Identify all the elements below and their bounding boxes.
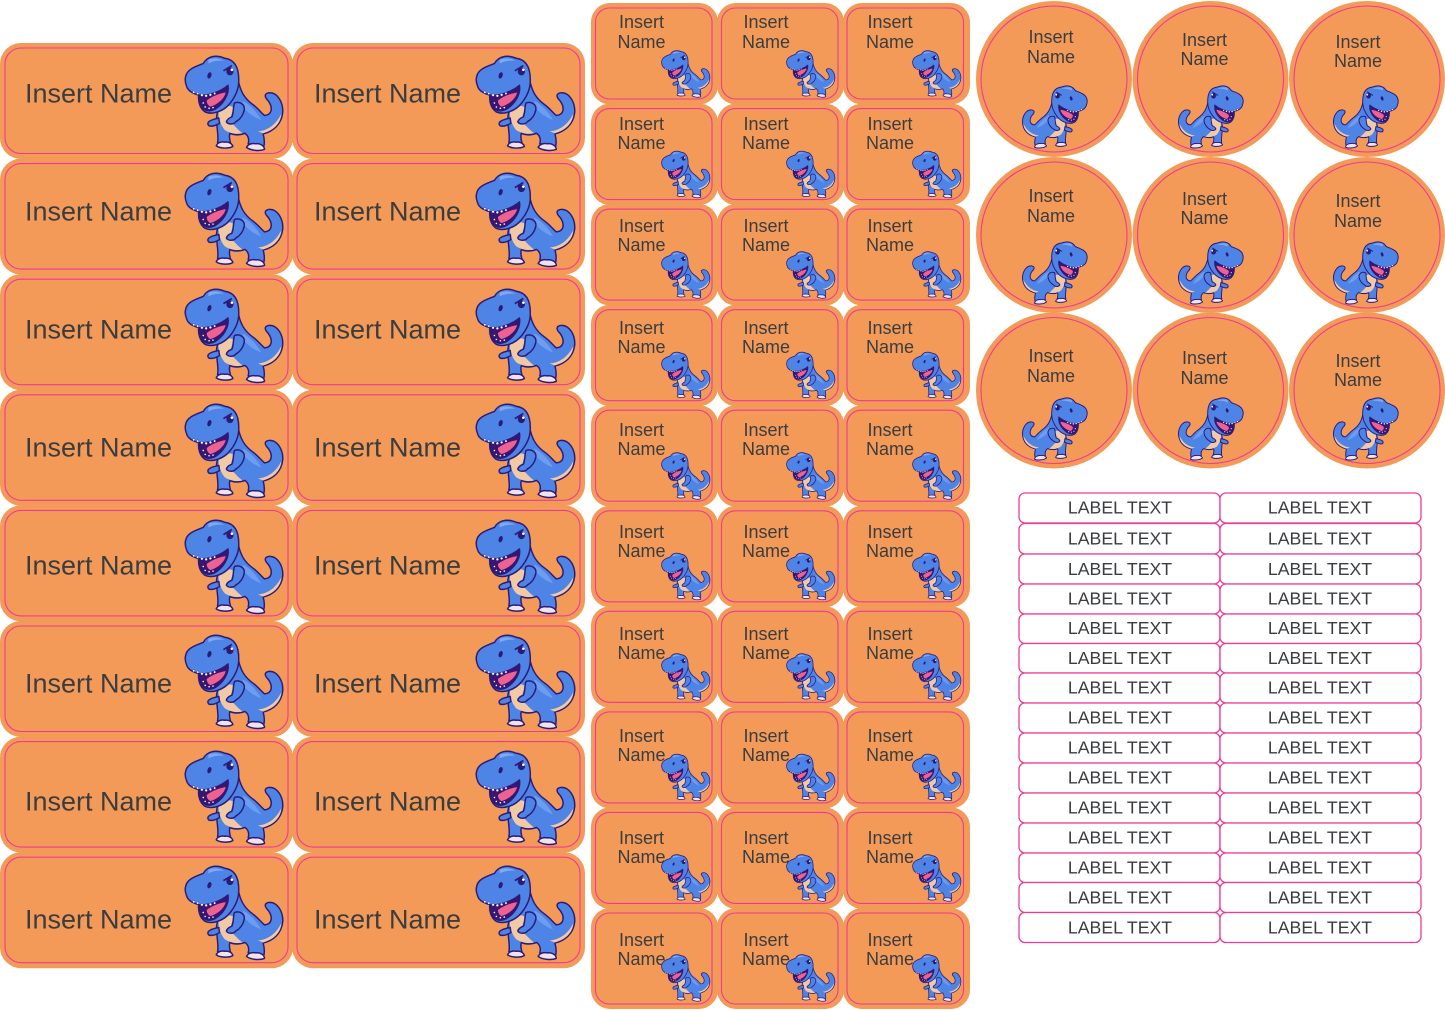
text label r4 c1 (1019, 584, 1220, 614)
label: medium r1 c2 (717, 3, 844, 104)
label: medium r4 c2: Insert (743, 318, 789, 338)
round label r2 c3 (1289, 157, 1445, 313)
label: medium r3 c2: Insert (743, 216, 789, 236)
label: large 16: Insert Name (314, 904, 461, 934)
label: large 8: Insert Name (314, 432, 461, 462)
text label r1 c2: LABEL TEXT (1268, 497, 1372, 517)
text label r5 c1 (1019, 614, 1220, 644)
round label r2 c3: Insert (1335, 191, 1381, 211)
label: medium r2 c2: Name (742, 133, 790, 153)
label: medium r9 c3: Insert (867, 828, 913, 848)
label: medium r3 c3 (843, 204, 970, 306)
text label r10 c2 (1220, 763, 1421, 793)
label: medium r7 c3 (843, 606, 970, 708)
label: medium r6 c3 (843, 506, 970, 607)
label: medium r2 c1: Name (617, 133, 666, 153)
round label r3 c1: Name (1027, 366, 1075, 386)
text label r7 c1 (1019, 673, 1220, 703)
text label r1 c1 (1019, 493, 1220, 523)
label: medium r8 c1: Insert (619, 726, 664, 746)
text label r12 c1: LABEL TEXT (1068, 827, 1172, 847)
text label r13 c1: LABEL TEXT (1068, 857, 1172, 877)
label: large 12 (292, 621, 585, 737)
text label r12 c1 (1019, 823, 1220, 853)
label: large 15 (0, 852, 293, 968)
label: medium r4 c2 (717, 305, 844, 406)
label: large 10: Insert Name (314, 550, 461, 580)
label: medium r7 c3: Insert (867, 624, 913, 644)
round label r2 c2 (1132, 157, 1288, 313)
text label r2 c2 (1220, 524, 1421, 554)
round label r3 c1: Insert (1028, 346, 1074, 366)
label: medium r4 c1: Insert (619, 318, 664, 338)
text label r2 c2: LABEL TEXT (1268, 528, 1372, 548)
label: medium r4 c3: Name (866, 337, 914, 357)
round label r2 c2: Insert (1182, 189, 1227, 209)
label: medium r10 c2 (717, 908, 844, 1009)
label: large 6: Insert Name (314, 314, 461, 344)
label: medium r3 c1: Name (617, 235, 666, 255)
text label r5 c1: LABEL TEXT (1068, 618, 1172, 638)
round label r1 c1: Insert (1028, 27, 1074, 47)
label: medium r6 c3: Name (866, 541, 914, 561)
label: medium r1 c3: Name (866, 32, 914, 52)
round label r1 c2: Insert (1182, 30, 1227, 50)
label: large 7 (0, 390, 293, 506)
label: large 12: Insert Name (314, 668, 461, 698)
text label r7 c2 (1220, 673, 1421, 703)
label: large 1: Insert Name (25, 78, 172, 108)
round label r1 c3: Insert (1335, 32, 1381, 52)
label: medium r8 c1 (591, 707, 718, 808)
label: medium r4 c3: Insert (867, 318, 913, 338)
round label r3 c2: Insert (1182, 348, 1227, 368)
text label r3 c2 (1220, 554, 1421, 584)
text label r6 c1 (1019, 644, 1220, 673)
label: medium r8 c1: Name (617, 745, 666, 765)
label: medium r5 c3 (843, 405, 970, 507)
label: medium r5 c2 (717, 405, 844, 507)
label: medium r2 c1: Insert (619, 114, 664, 134)
label: medium r7 c2: Insert (743, 624, 789, 644)
text label r8 c1: LABEL TEXT (1068, 707, 1172, 727)
label: large 8 (292, 390, 585, 506)
text label r13 c2 (1220, 853, 1421, 882)
label: medium r1 c2: Name (742, 32, 790, 52)
label: medium r6 c1 (591, 506, 718, 607)
label: large 15: Insert Name (25, 904, 172, 934)
label: large 6 (292, 274, 585, 390)
text label r15 c1: LABEL TEXT (1068, 917, 1172, 937)
text label r13 c1 (1019, 853, 1220, 882)
label: medium r6 c1: Name (617, 541, 666, 561)
text label r15 c1 (1019, 912, 1220, 942)
label: medium r7 c2: Name (742, 643, 790, 663)
text label r14 c1: LABEL TEXT (1068, 887, 1172, 907)
label: medium r3 c3: Name (866, 235, 914, 255)
label: medium r1 c1: Insert (619, 12, 664, 32)
label: large 3: Insert Name (25, 196, 172, 226)
label: medium r2 c2: Insert (743, 114, 789, 134)
text label r12 c2: LABEL TEXT (1268, 827, 1372, 847)
round label r1 c1 (976, 1, 1132, 157)
label: medium r6 c3: Insert (867, 522, 913, 542)
round label r2 c2: Name (1180, 208, 1229, 228)
label: medium r4 c2: Name (742, 337, 790, 357)
label: medium r2 c2 (717, 104, 844, 205)
text label r15 c2 (1220, 912, 1421, 942)
label: large 4: Insert Name (314, 196, 461, 226)
label: large 5: Insert Name (25, 314, 172, 344)
text label r9 c1 (1019, 733, 1220, 763)
label: large 7: Insert Name (25, 432, 172, 462)
label: medium r10 c1: Name (617, 949, 666, 969)
label: medium r7 c1 (591, 606, 718, 708)
label: large 2: Insert Name (314, 78, 461, 108)
label: medium r10 c2: Insert (743, 930, 789, 950)
label: medium r5 c3: Name (866, 439, 914, 459)
label: medium r6 c2: Name (742, 541, 790, 561)
label: medium r9 c2: Insert (743, 828, 789, 848)
label: large 13: Insert Name (25, 786, 172, 816)
label: large 16 (292, 852, 585, 968)
label: medium r8 c3: Name (866, 745, 914, 765)
label: medium r10 c3: Insert (867, 930, 913, 950)
label: medium r3 c1: Insert (619, 216, 664, 236)
label: medium r9 c2 (717, 807, 844, 909)
label: medium r7 c3: Name (866, 643, 914, 663)
label: medium r9 c1 (591, 807, 718, 909)
text label r6 c2: LABEL TEXT (1268, 648, 1372, 668)
text label r10 c1 (1019, 763, 1220, 793)
label: medium r7 c2 (717, 606, 844, 708)
label: medium r8 c2: Name (742, 745, 790, 765)
label: medium r6 c2 (717, 506, 844, 607)
label: medium r10 c3 (843, 908, 970, 1009)
label: medium r8 c3 (843, 707, 970, 808)
round label r1 c3: Name (1334, 51, 1382, 71)
round label r1 c1: Name (1027, 47, 1075, 67)
text label r4 c2 (1220, 584, 1421, 614)
label: large 14 (292, 737, 585, 853)
label: medium r9 c2: Name (742, 847, 790, 867)
label: large 9 (0, 505, 293, 621)
text label r14 c1 (1019, 882, 1220, 912)
round label r1 c2: Name (1180, 49, 1229, 69)
label: large 5 (0, 274, 293, 390)
label: medium r7 c1: Insert (619, 624, 664, 644)
text label r6 c1: LABEL TEXT (1068, 648, 1172, 668)
label: medium r2 c3: Insert (867, 114, 913, 134)
text label r10 c2: LABEL TEXT (1268, 767, 1372, 787)
label: medium r3 c3: Insert (867, 216, 913, 236)
text label r8 c1 (1019, 703, 1220, 733)
label: medium r4 c1: Name (617, 337, 666, 357)
label: medium r2 c3 (843, 104, 970, 205)
label: medium r10 c1 (591, 908, 718, 1009)
round label r3 c3 (1289, 312, 1445, 468)
label: medium r5 c1: Insert (619, 420, 664, 440)
text label r11 c1: LABEL TEXT (1068, 797, 1172, 817)
round label r1 c3 (1289, 1, 1445, 157)
round label r3 c2 (1132, 312, 1288, 468)
text label r2 c1: LABEL TEXT (1068, 528, 1172, 548)
text label r5 c2 (1220, 614, 1421, 644)
label: medium r9 c1: Name (617, 847, 666, 867)
text label r5 c2: LABEL TEXT (1268, 618, 1372, 638)
text label r1 c2 (1220, 493, 1421, 523)
label: large 3 (0, 159, 293, 275)
label: large 4 (292, 159, 585, 275)
label: medium r8 c3: Insert (867, 726, 913, 746)
label: large 11 (0, 621, 293, 737)
label: medium r7 c1: Name (617, 643, 666, 663)
text label r15 c2: LABEL TEXT (1268, 917, 1372, 937)
round label r2 c1 (976, 157, 1132, 313)
round label r2 c1: Name (1027, 206, 1075, 226)
label: medium r5 c2: Insert (743, 420, 789, 440)
label: large 1 (0, 43, 293, 159)
round label r2 c1: Insert (1028, 186, 1074, 206)
label: medium r1 c3 (843, 3, 970, 104)
label: medium r1 c3: Insert (867, 12, 913, 32)
label: medium r1 c1: Name (617, 32, 666, 52)
text label r2 c1 (1019, 524, 1220, 554)
text label r8 c2: LABEL TEXT (1268, 707, 1372, 727)
text label r9 c1: LABEL TEXT (1068, 737, 1172, 757)
text label r4 c1: LABEL TEXT (1068, 588, 1172, 608)
text label r10 c1: LABEL TEXT (1068, 767, 1172, 787)
round label r1 c2 (1132, 1, 1288, 157)
text label r11 c2: LABEL TEXT (1268, 797, 1372, 817)
label: large 11: Insert Name (25, 668, 172, 698)
round label r2 c3: Name (1334, 211, 1382, 231)
text label r3 c1 (1019, 554, 1220, 584)
text label r14 c2 (1220, 882, 1421, 912)
label: medium r6 c1: Insert (619, 522, 664, 542)
label: medium r10 c3: Name (866, 949, 914, 969)
label: medium r8 c2: Insert (743, 726, 789, 746)
round label r3 c1 (976, 312, 1132, 468)
label: medium r2 c3: Name (866, 133, 914, 153)
text label r3 c2: LABEL TEXT (1268, 559, 1372, 579)
label: medium r9 c1: Insert (619, 828, 664, 848)
label: medium r8 c2 (717, 707, 844, 808)
label: medium r9 c3 (843, 807, 970, 909)
label: medium r4 c3 (843, 305, 970, 406)
label: large 9: Insert Name (25, 550, 172, 580)
text label r11 c2 (1220, 793, 1421, 823)
text label r9 c2 (1220, 733, 1421, 763)
round label r3 c3: Name (1334, 370, 1382, 390)
label: medium r3 c2: Name (742, 235, 790, 255)
label: medium r9 c3: Name (866, 847, 914, 867)
label: large 10 (292, 505, 585, 621)
label: large 14: Insert Name (314, 786, 461, 816)
round label r3 c2: Name (1180, 368, 1229, 388)
text label r13 c2: LABEL TEXT (1268, 857, 1372, 877)
label: large 2 (292, 43, 585, 159)
text label r8 c2 (1220, 703, 1421, 733)
label: medium r5 c3: Insert (867, 420, 913, 440)
text label r6 c2 (1220, 644, 1421, 673)
label: medium r4 c1 (591, 305, 718, 406)
round label r3 c3: Insert (1335, 351, 1381, 371)
text label r12 c2 (1220, 823, 1421, 853)
label: medium r6 c2: Insert (743, 522, 789, 542)
label: medium r5 c2: Name (742, 439, 790, 459)
label: medium r2 c1 (591, 104, 718, 205)
text label r14 c2: LABEL TEXT (1268, 887, 1372, 907)
label: medium r3 c2 (717, 204, 844, 306)
label: medium r5 c1 (591, 405, 718, 507)
label: medium r10 c2: Name (742, 949, 790, 969)
text label r9 c2: LABEL TEXT (1268, 737, 1372, 757)
text label r11 c1 (1019, 793, 1220, 823)
label: medium r1 c2: Insert (743, 12, 789, 32)
label: large 13 (0, 737, 293, 853)
label: medium r1 c1 (591, 3, 718, 104)
label: medium r10 c1: Insert (619, 930, 664, 950)
label: medium r5 c1: Name (617, 439, 666, 459)
text label r7 c1: LABEL TEXT (1068, 677, 1172, 697)
text label r1 c1: LABEL TEXT (1068, 497, 1172, 517)
text label r4 c2: LABEL TEXT (1268, 588, 1372, 608)
text label r3 c1: LABEL TEXT (1068, 559, 1172, 579)
label: medium r3 c1 (591, 204, 718, 306)
text label r7 c2: LABEL TEXT (1268, 677, 1372, 697)
